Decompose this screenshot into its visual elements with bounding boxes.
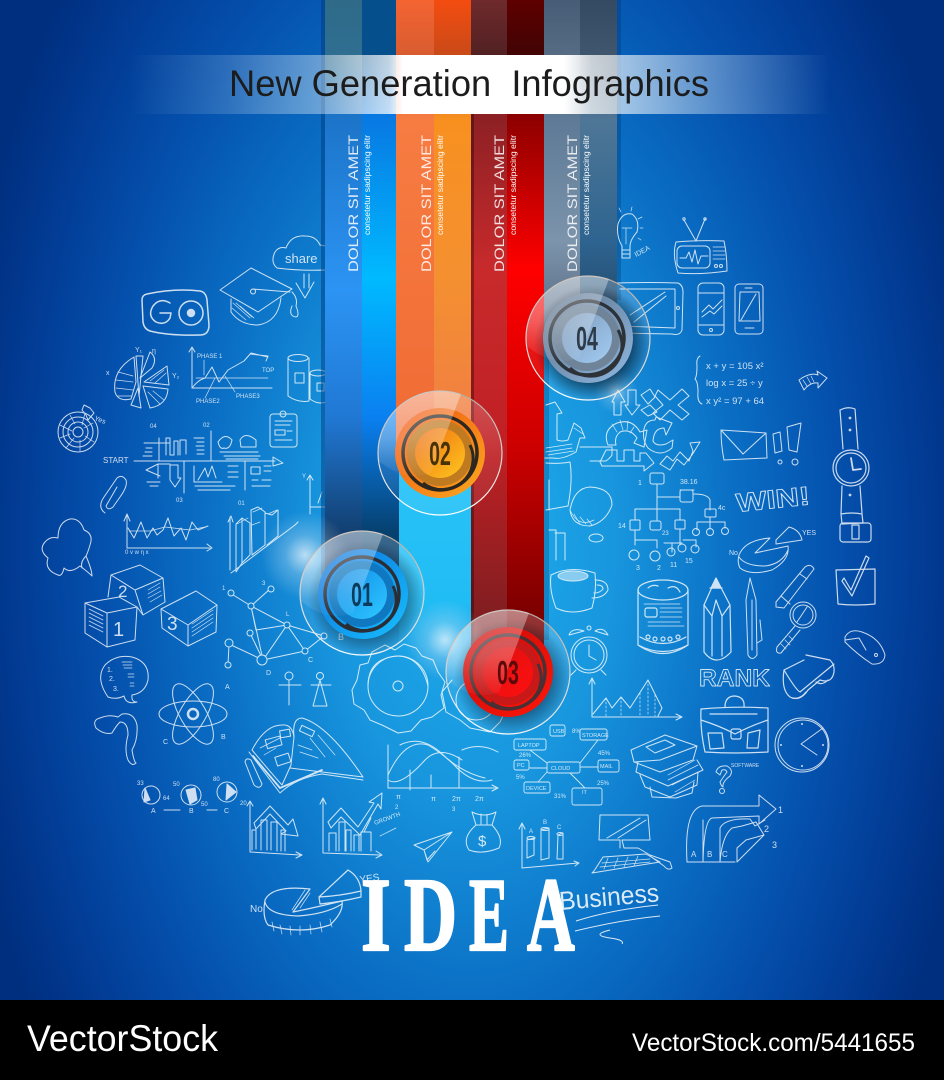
IDEA lettering: D	[404, 856, 457, 973]
timeline: start: START	[103, 456, 129, 465]
icon: books stack	[631, 735, 703, 798]
icon: curly three	[95, 714, 137, 764]
panel: blue stripe	[325, 0, 399, 575]
icon: cubes 1 2 3	[85, 565, 217, 647]
icon: mouse	[845, 631, 885, 664]
icon: spiral target	[58, 405, 107, 452]
diagram: cloud map: PC	[517, 763, 525, 769]
timeline: start: 03	[176, 498, 183, 504]
pie chart: right: YES	[802, 530, 816, 537]
flowchart: 23	[662, 531, 669, 537]
timeline: start: 01	[238, 501, 245, 507]
flowchart: 11	[670, 562, 677, 569]
small axes	[302, 474, 325, 514]
bar chart: 3D: B	[543, 820, 547, 826]
icon: light bulb: IDEA	[634, 245, 652, 259]
icon: small pies: C	[224, 808, 229, 815]
number: 02	[429, 435, 451, 472]
icons: arrows cluster	[612, 389, 689, 420]
IDEA lettering: E	[469, 858, 509, 973]
line chart: phases: PHASE 1	[197, 354, 223, 360]
network diagram: C	[308, 657, 313, 664]
icon: GO badge	[142, 290, 209, 335]
badge 04	[526, 275, 650, 401]
diagram: cloud map: MAIL	[600, 764, 613, 770]
badge 02	[378, 390, 502, 515]
icon: small pies: 50	[201, 802, 208, 808]
icon: small pies: 33	[137, 781, 144, 787]
flowchart: 1	[638, 480, 642, 487]
icon: computer	[592, 815, 672, 873]
badge 03	[446, 609, 570, 735]
flowchart: 14	[618, 523, 626, 530]
line chart: waves	[124, 514, 212, 556]
chart: sine curves: 3	[452, 807, 456, 813]
stripe text: blue: DOLOR SIT AMET	[346, 135, 361, 272]
icon: tablet	[617, 282, 683, 334]
line chart: phases: TOP	[262, 368, 274, 374]
line chart: phases	[189, 347, 274, 405]
icon: exclamations	[773, 423, 801, 465]
icon: small pies: 50	[173, 782, 180, 788]
bar chart: rising: GROWTH	[374, 812, 401, 827]
bar chart: 3D	[519, 820, 579, 868]
IDEA lettering: A	[527, 857, 575, 973]
network diagram: B	[338, 632, 344, 642]
timeline: start	[103, 423, 283, 507]
glow spots	[261, 370, 638, 680]
diagram: cloud map: STORAGE	[582, 733, 609, 739]
stripe text: orange: consetetur sadipscing elitr	[436, 135, 445, 235]
icon: atom	[159, 678, 227, 750]
chart: sine curves	[388, 741, 498, 813]
pie chart: sketch	[106, 347, 180, 408]
icon: stick figures	[279, 672, 331, 706]
stripe text: blue: consetetur sadipscing elitr	[363, 135, 372, 235]
icon: question mark: SOFTWARE	[731, 763, 760, 769]
icon: question mark	[716, 763, 760, 794]
stripe text: blue	[346, 135, 372, 272]
icon: speech bubble: 2.	[109, 676, 115, 683]
icon: briefcase	[701, 696, 768, 753]
doodles: centre	[352, 644, 672, 873]
stripe text: grey: consetetur sadipscing elitr	[582, 135, 591, 235]
line chart: phases: PHASE3	[236, 394, 260, 400]
icon: three arrows: 2	[764, 824, 769, 834]
icon: graduation cap	[220, 268, 298, 325]
icon: glasses	[783, 655, 834, 698]
chart: sine curves: π	[396, 794, 401, 801]
icon: gear	[352, 644, 445, 733]
icon: small pies: 64	[163, 796, 170, 802]
pie chart: sketch: Y₁	[135, 347, 143, 354]
stripe text: red: consetetur sadipscing elitr	[509, 135, 518, 235]
diagram: cloud map: LAPTOP	[518, 743, 540, 749]
icon: phone	[735, 284, 763, 334]
flowchart: 38.16	[680, 479, 698, 486]
icon: bubble and cup	[549, 480, 612, 612]
number: 04	[576, 320, 598, 357]
diagram: cloud map: 25%	[597, 781, 610, 787]
3D bars	[228, 507, 298, 573]
icon: light bulb	[618, 207, 652, 259]
panel: red stripe	[471, 0, 544, 650]
stripe text: orange: DOLOR SIT AMET	[419, 135, 434, 272]
timeline: start: 02	[203, 423, 210, 429]
number: 03	[497, 654, 519, 691]
stripe text: grey: DOLOR SIT AMET	[565, 135, 580, 272]
icon: small pies: 20	[240, 801, 247, 807]
icon: three arrows	[687, 795, 783, 862]
pie chart: sketch: x	[106, 370, 110, 377]
diagram: cloud map: CLOUD	[551, 766, 570, 772]
title: New Generation Infographics	[229, 63, 709, 104]
icon: gear two	[442, 680, 510, 732]
bar chart: 3D: C	[557, 825, 562, 831]
icon: big pencil	[776, 565, 814, 608]
stripe text: grey	[565, 135, 591, 272]
number: 01	[351, 576, 373, 613]
icon: three arrows: B	[707, 850, 712, 859]
icon: three arrows: C	[722, 850, 728, 859]
icon: speech bubble	[101, 656, 148, 703]
area chart	[589, 678, 682, 720]
diagram: cloud map: IT	[582, 790, 588, 796]
equations: x + y = 105 x²	[706, 361, 764, 372]
icon: money bag: $	[478, 833, 487, 850]
network diagram: L	[286, 612, 290, 618]
icon: speech bubble: 3.	[113, 686, 119, 693]
chart: sine curves: 2π	[452, 796, 461, 803]
equations: x y² = 97 + 64	[706, 396, 764, 407]
panel: light cyan strip under orange stripe	[399, 460, 471, 665]
icon: wall clock	[775, 718, 829, 772]
footer logo: VectorStock	[27, 1018, 218, 1059]
icon: cubes 1 2 3: 2	[118, 582, 127, 601]
panel: grey stripe	[544, 0, 617, 345]
equations	[695, 356, 764, 407]
timeline: start: 04	[150, 424, 157, 430]
bar chart: 3D: A	[529, 829, 533, 835]
chart: sine curves: 2	[395, 805, 399, 811]
flowchart: 3	[636, 565, 640, 572]
icon: three arrows: 3	[772, 840, 777, 850]
icon: phone chart	[698, 283, 724, 335]
IDEA lettering: I	[361, 856, 391, 973]
diagram: cloud map: 26%	[519, 753, 532, 759]
Business note: Business	[558, 877, 660, 916]
network diagram: 3	[262, 581, 266, 587]
pie chart: no yes	[250, 870, 381, 935]
diagram: cloud map	[514, 725, 619, 805]
flowchart: 4c	[718, 505, 726, 512]
panel: orange stripe	[396, 0, 471, 460]
diagram: cloud map: 31%	[554, 794, 567, 800]
icon: magnifier	[776, 602, 816, 653]
icon: spiral target: Yes	[93, 415, 107, 426]
bar chart: falling	[247, 801, 302, 858]
icon: small pies: 80	[213, 777, 220, 783]
diagram: cloud map: USB	[553, 729, 565, 735]
icon: envelope	[721, 430, 767, 460]
network diagram: A	[225, 684, 230, 691]
icon: three arrows: 1	[778, 805, 783, 815]
pie chart: no yes: YES	[359, 872, 381, 886]
icon: pencil	[704, 578, 731, 660]
RANK doodle: RANK	[699, 665, 771, 692]
icon: three arrows: A	[691, 850, 697, 859]
icon: small pies: A	[151, 808, 156, 815]
chart: sine curves: 2π	[475, 796, 484, 803]
flowchart: 2	[657, 565, 661, 572]
diagram: cloud map: 8%	[572, 729, 581, 735]
footer band	[0, 1000, 944, 1080]
chart: sine curves: π	[431, 796, 436, 803]
icon: clipboard	[270, 411, 297, 447]
icon: share cloud: share	[285, 251, 318, 266]
flowchart: 15	[685, 558, 693, 565]
network diagram: 1	[222, 586, 226, 592]
network diagram: D	[266, 670, 271, 677]
equations: log x = 25 ÷ y	[706, 378, 763, 389]
badge 01	[300, 530, 424, 656]
network diagram	[222, 581, 344, 691]
line chart: phases: PHASE2	[196, 399, 220, 405]
icon: atom: C	[163, 739, 168, 746]
stripe text: red	[492, 135, 518, 272]
stripe shadows	[321, 0, 621, 640]
icon: cubes 1 2 3: 1	[113, 619, 124, 641]
icon: paper plane	[414, 832, 452, 862]
icon: speech bubble: 1.	[107, 667, 113, 674]
icon: share cloud	[273, 236, 326, 298]
flowchart	[618, 473, 728, 572]
icon: paperclip	[101, 476, 126, 513]
banner	[130, 55, 830, 114]
icon: atom: B	[221, 734, 226, 741]
doodles: left column	[42, 236, 401, 935]
icon: small arrow	[799, 371, 827, 390]
icons: flow arrows	[545, 402, 700, 510]
icon: cubes 1 2 3: 3	[167, 614, 178, 635]
icon: wristwatch	[833, 408, 871, 542]
stripe text: orange	[419, 135, 445, 272]
small axes: Y	[302, 474, 306, 480]
icon: jars	[288, 354, 326, 403]
footer url: VectorStock.com/5441655	[632, 1029, 915, 1057]
pie chart: no yes: No	[250, 904, 263, 915]
diagram: cloud map: 45%	[598, 751, 611, 757]
icon: money bag	[466, 812, 500, 852]
icon: small pies: B	[189, 808, 194, 815]
icon: small pies	[137, 777, 247, 815]
icon: thought cloud	[42, 519, 92, 576]
icon: open book	[245, 718, 363, 793]
icon: can	[638, 580, 688, 654]
icon: check box	[836, 556, 875, 605]
diagram: cloud map: 5%	[516, 775, 525, 781]
bar chart: rising	[320, 793, 401, 858]
WIN doodle: WIN!	[734, 480, 811, 518]
icon: pen	[746, 578, 762, 658]
doodles: right column	[514, 207, 885, 862]
icon: alarm clock	[569, 626, 608, 675]
line chart: waves: 0 v w η x	[125, 550, 149, 556]
IDEA lettering	[361, 856, 575, 973]
pie chart: right	[729, 527, 816, 573]
Business note	[558, 877, 660, 944]
pie chart: sketch: Y₂	[172, 373, 180, 380]
stripe text: red: DOLOR SIT AMET	[492, 135, 507, 272]
diagram: cloud map: DEVICE	[526, 786, 547, 792]
icon: tv	[674, 218, 727, 274]
pie chart: sketch: η	[152, 348, 156, 355]
pie chart: right: No	[729, 550, 738, 557]
